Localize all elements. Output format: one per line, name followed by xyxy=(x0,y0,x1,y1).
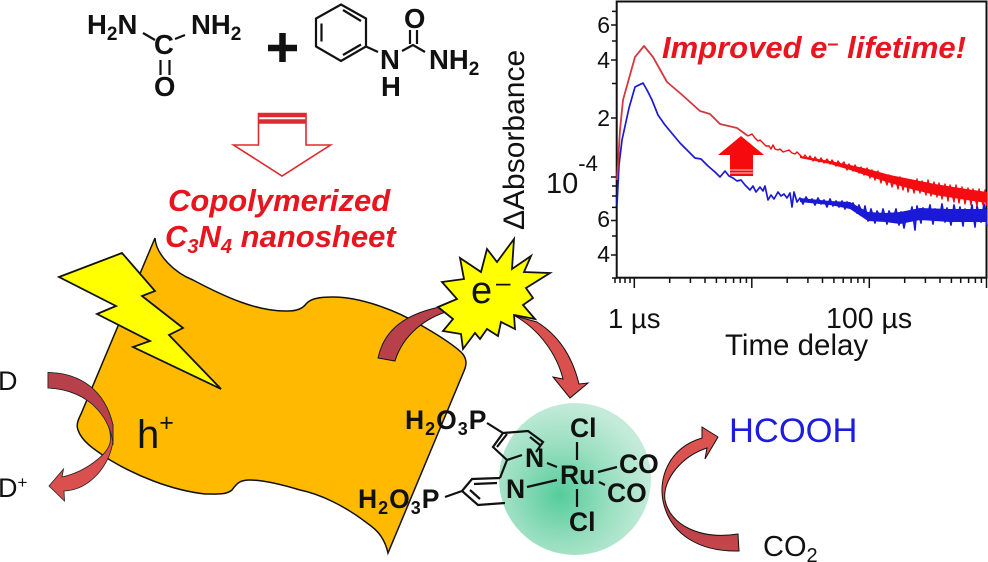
Ru catalyst molecule: O xyxy=(389,484,411,514)
reactant: phenylurea: 2 xyxy=(469,59,479,80)
arrow: electron excitation xyxy=(378,306,449,361)
Ru catalyst molecule: CO xyxy=(619,449,659,479)
reactant: urea: N xyxy=(117,9,137,40)
label: HCOOH: HCOOH xyxy=(729,412,857,450)
Ru catalyst molecule: P xyxy=(469,405,487,435)
reactant: phenylurea: NH xyxy=(429,44,469,75)
reactant: urea: C xyxy=(154,29,174,60)
Ru catalyst molecule: Ru xyxy=(560,460,595,490)
catalyst sphere xyxy=(499,403,651,555)
arrow: electron transfer to catalyst xyxy=(515,316,588,398)
y axis title: ΔAbsorbance xyxy=(498,50,531,230)
arrow: CO2 to HCOOH xyxy=(662,427,739,551)
label: copolymerized nanosheet: 4 xyxy=(220,236,232,258)
Ru catalyst molecule: 2 xyxy=(378,498,389,518)
y axis labels: 6 xyxy=(597,206,610,232)
reactant: urea: O xyxy=(154,71,175,102)
label: copolymerized nanosheet: C xyxy=(165,219,187,254)
arrow: donor oxidation xyxy=(48,372,113,501)
reactant: urea: NH xyxy=(191,9,231,40)
Ru catalyst molecule: Cl xyxy=(570,413,596,443)
label: e-: – xyxy=(496,267,511,297)
C3N4 nanosheet xyxy=(77,238,466,553)
label: copolymerized nanosheet: Copolymerized xyxy=(168,183,391,218)
reactant: phenylurea: O xyxy=(404,3,425,34)
label: D+: + xyxy=(18,473,28,492)
reactant: phenylurea: N xyxy=(380,44,400,75)
Ru catalyst molecule xyxy=(358,405,659,537)
label: e-: e xyxy=(471,270,492,312)
label: copolymerized nanosheet: N xyxy=(199,219,222,254)
y axis labels xyxy=(597,12,610,267)
label: improved lifetime: Improved e xyxy=(662,30,827,65)
Ru catalyst molecule: H xyxy=(405,405,425,435)
x axis ticks xyxy=(612,278,986,288)
reactant: phenylurea xyxy=(316,3,479,102)
reactant: urea: H xyxy=(87,9,107,40)
chart frame xyxy=(617,2,986,278)
lightning bolt xyxy=(59,253,221,389)
reactant: urea: 2 xyxy=(231,24,241,45)
Ru catalyst molecule: H xyxy=(358,484,378,514)
decay chart xyxy=(498,2,987,362)
label: improved lifetime: lifetime! xyxy=(839,30,966,65)
y axis labels: 4 xyxy=(597,47,610,73)
x axis title: Time delay xyxy=(725,329,868,362)
y axis label: 10^-4: 10 xyxy=(546,168,578,200)
electron burst xyxy=(438,239,550,349)
hollow red arrow xyxy=(234,114,330,176)
label: copolymerized nanosheet: 3 xyxy=(187,236,199,258)
plus sign xyxy=(268,33,297,62)
reactant: phenylurea: H xyxy=(381,71,401,102)
label: copolymerized nanosheet xyxy=(165,183,397,258)
label: improved lifetime: – xyxy=(827,33,839,55)
y axis labels: 6 xyxy=(597,12,610,38)
Ru catalyst molecule: P xyxy=(422,484,440,514)
label: h+: h xyxy=(137,413,159,457)
Ru catalyst molecule: O xyxy=(436,405,458,435)
Ru catalyst molecule: 3 xyxy=(411,498,422,518)
y axis label: 10^-4: -4 xyxy=(578,151,598,176)
x axis labels: 1 µs xyxy=(608,303,661,334)
Ru catalyst molecule: N xyxy=(525,443,544,473)
y axis labels: 4 xyxy=(597,241,610,267)
label: copolymerized nanosheet: nanosheet xyxy=(232,219,397,254)
Ru catalyst molecule: 2 xyxy=(425,419,436,439)
y axis ticks xyxy=(611,11,616,255)
reactant: urea xyxy=(87,9,241,102)
Ru catalyst molecule: 3 xyxy=(458,419,469,439)
Ru catalyst molecule: N xyxy=(506,474,525,504)
red up arrow xyxy=(718,136,764,176)
y axis labels: 2 xyxy=(597,105,610,131)
reactant: urea: 2 xyxy=(107,24,117,45)
label: h+: + xyxy=(159,409,174,437)
Ru catalyst molecule: CO xyxy=(607,478,647,508)
blue trace xyxy=(617,83,987,230)
red trace xyxy=(617,46,987,206)
Ru catalyst molecule: Cl xyxy=(569,507,596,537)
decay chart: 100 µs xyxy=(826,303,912,335)
